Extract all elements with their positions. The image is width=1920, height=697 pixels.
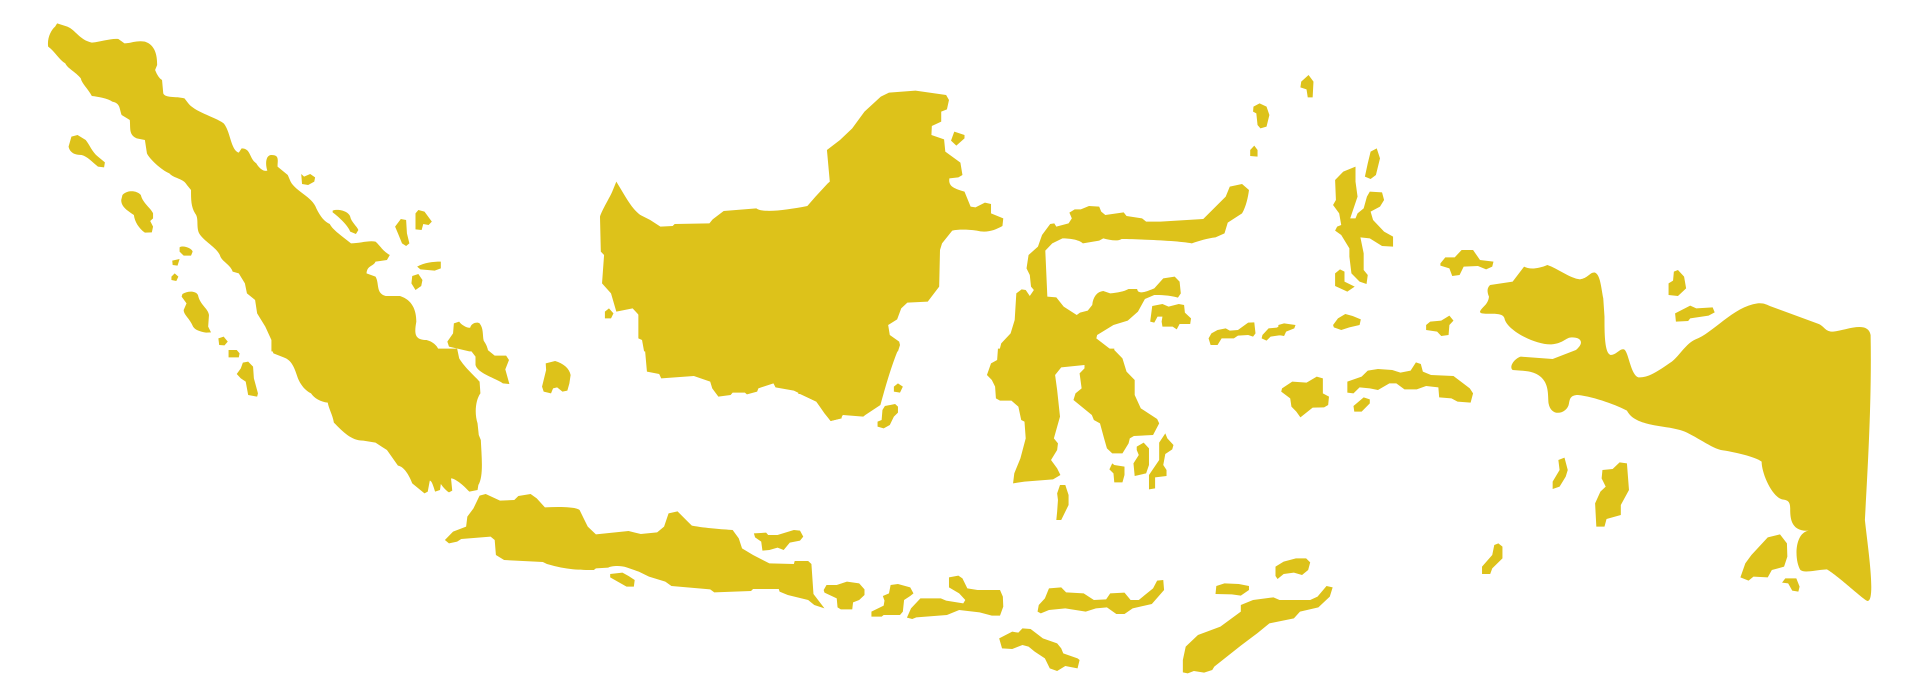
islands: Lesser Sunda: [824, 558, 1333, 673]
islands: Maluku south: [1278, 314, 1629, 574]
island: Papua: [1480, 265, 1871, 601]
island: Kalimantan: [600, 91, 1003, 421]
islands: around Sulawesi: [1056, 103, 1282, 520]
islands: Maluku north: [1300, 75, 1493, 292]
island: Wetar: [1276, 558, 1310, 579]
island: Sumbawa: [907, 576, 1003, 619]
island: Madura: [754, 530, 803, 551]
island: Sumatra: [48, 23, 482, 493]
island: Bali: [824, 582, 864, 609]
island: Bangka: [447, 322, 509, 384]
islands: Riau and Lingga: [301, 174, 441, 290]
islands: around Papua: [1669, 270, 1800, 592]
island: Java: [445, 494, 824, 608]
island: Timor: [1183, 586, 1333, 673]
island: Flores: [1038, 580, 1164, 614]
island: Sumba: [999, 628, 1080, 671]
island: Nusa Kambangan: [610, 573, 635, 587]
island: Sulawesi: [987, 184, 1249, 483]
island: Alor: [1216, 583, 1249, 596]
islands: around Kalimantan: [605, 132, 964, 428]
island: Lombok: [871, 584, 913, 617]
islands: west of Sumatra: [69, 135, 258, 397]
island: Belitung: [542, 361, 571, 393]
